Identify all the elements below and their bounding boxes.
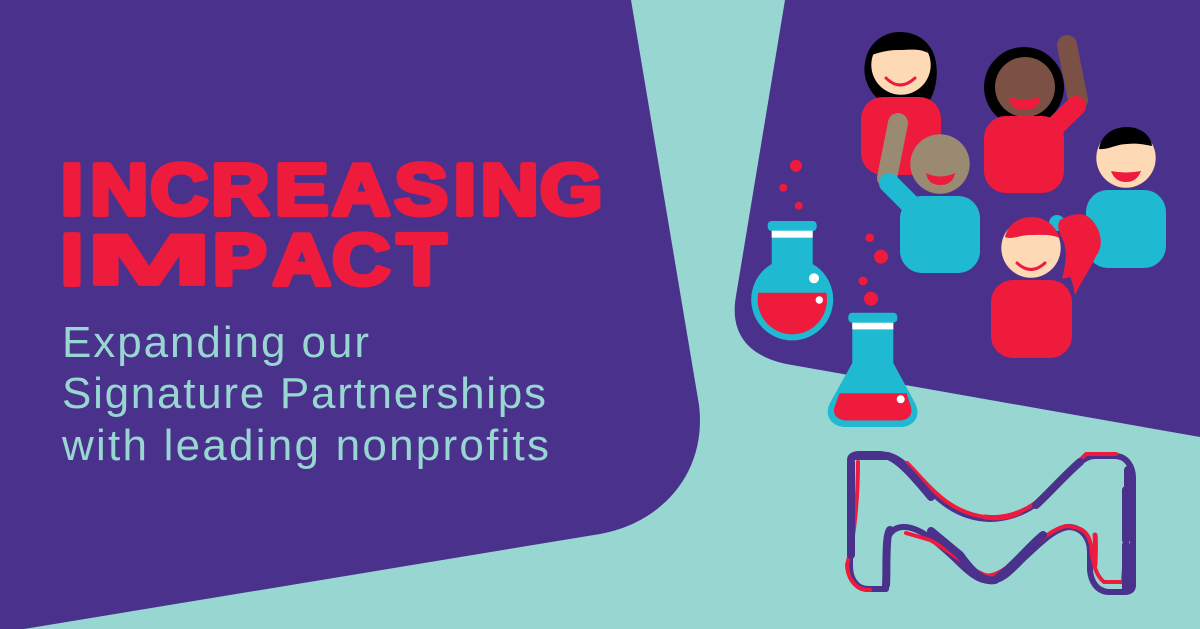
subtitle: with leading nonprofits (61, 421, 549, 470)
icon: round flask (751, 221, 833, 341)
subtitle: Expanding our (62, 318, 369, 367)
title: I (61, 220, 83, 301)
subtitle (61, 318, 549, 470)
person: teal shirt with short black hair (1086, 127, 1166, 268)
person: red ponytail girl (991, 214, 1101, 358)
title: PACT (213, 220, 446, 301)
subtitle: Signature Partnerships (62, 369, 546, 418)
person: woman with long black hair (861, 32, 941, 175)
title (61, 150, 603, 301)
icon: bubbles above conical flask (858, 233, 888, 306)
panel: right purple shape (735, 0, 1200, 437)
title: INCREASING (61, 150, 603, 231)
panel: left purple shape (0, 0, 700, 629)
icon: conical flask (828, 313, 917, 427)
title: M (86, 220, 212, 300)
person: dark skin with raised arm (984, 45, 1078, 193)
logo: brush-stroke M (847, 454, 1133, 592)
icon: bubbles above round flask (779, 160, 803, 210)
person: teal shirt with tan arm raised (887, 123, 980, 273)
